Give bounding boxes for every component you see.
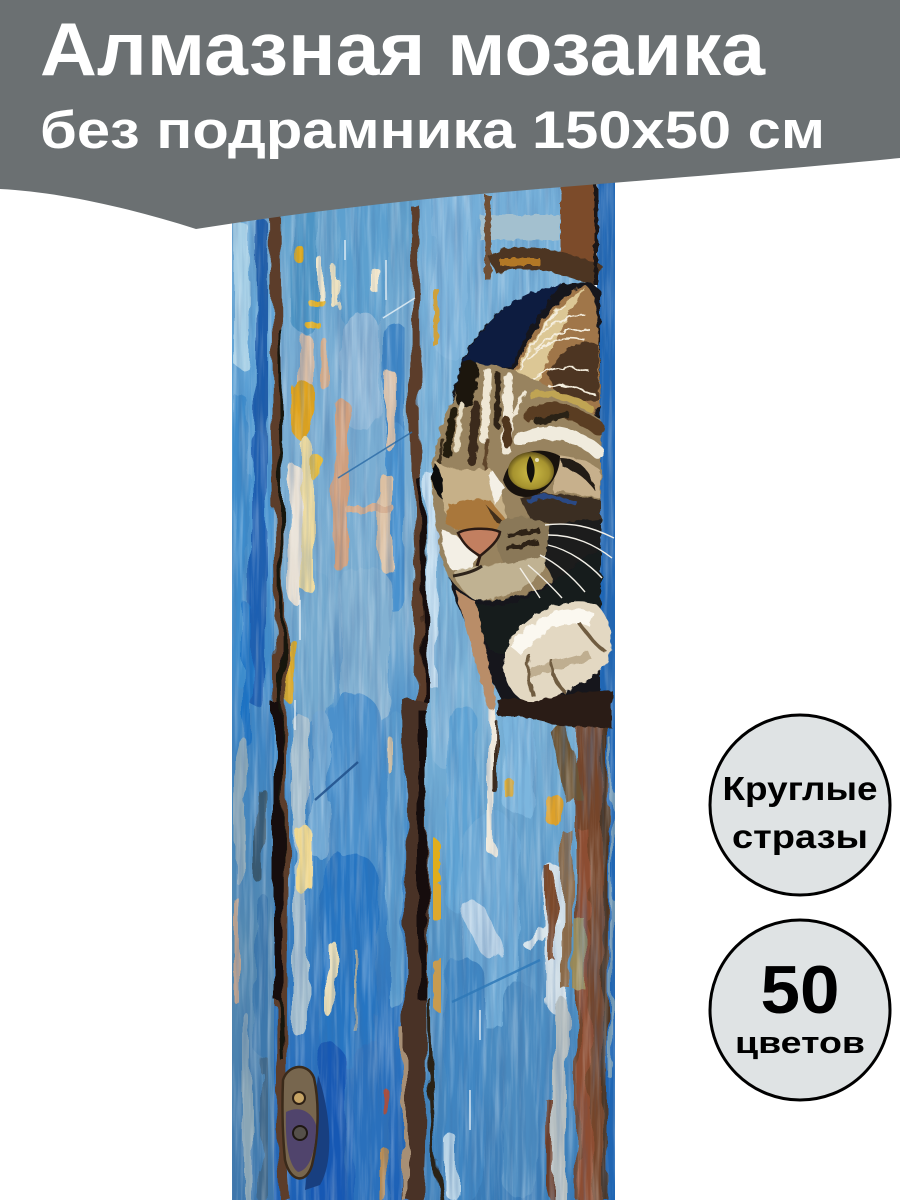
badge: round rhinestones: [710, 715, 890, 895]
dark opening behind the cat: [432, 282, 600, 705]
dark navy patch: [463, 284, 562, 368]
post edge under chin: [456, 590, 496, 711]
yellow drips on second seam: [434, 290, 440, 1005]
cat paw: [504, 601, 611, 702]
cat head: [432, 364, 601, 600]
badge: round rhinestones: Круглые: [722, 770, 878, 807]
ledge below paw: [498, 690, 612, 728]
middle plank strokes: [300, 210, 395, 1200]
forehead fur stripes: [440, 370, 598, 470]
header banner: [0, 0, 900, 229]
painted door base: [232, 180, 615, 1200]
hinge plate: [282, 1067, 329, 1190]
badge: 50 colours: цветов: [735, 1025, 865, 1060]
badge: 50 colours: [710, 920, 890, 1100]
cat ear: [512, 285, 600, 425]
dark plank seams: [275, 205, 440, 1200]
cat nose: [453, 529, 500, 576]
painting: cat peeking through blue door: [232, 180, 615, 1200]
whiskers: [520, 524, 614, 598]
title: Алмазная мозаика: [40, 7, 766, 91]
right brown plank: [550, 715, 612, 1200]
right plank strokes: [432, 200, 560, 1200]
tabby cheek: [520, 494, 601, 526]
texture streak overlays: [232, 180, 615, 1200]
cheek and bridge of the nose: [436, 462, 508, 530]
subtitle: без подрамника 150х50 см: [40, 101, 825, 160]
cat eye: [503, 451, 560, 497]
peeling peach and yellow paint: [290, 253, 392, 1200]
left plank strokes: [236, 225, 265, 1200]
thin highlight strokes: [295, 240, 540, 1130]
dark chest under chin: [567, 565, 604, 609]
badge: round rhinestones: стразы: [732, 818, 868, 855]
top right frame of the opening: [488, 180, 598, 285]
badge: 50 colours: 50: [760, 952, 840, 1028]
